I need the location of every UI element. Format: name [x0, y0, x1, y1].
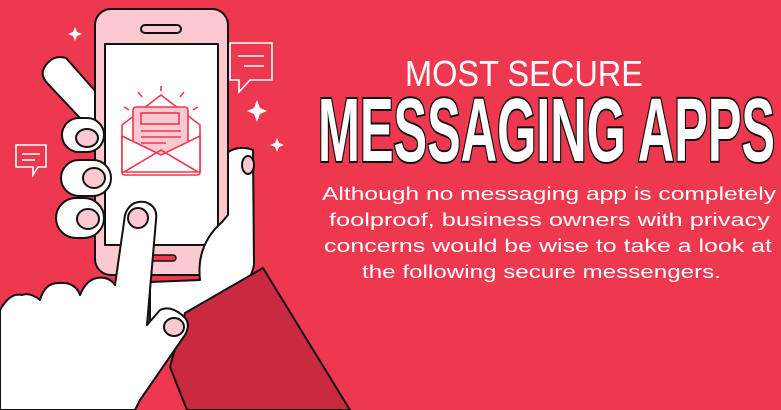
icon: sparkles: [68, 27, 284, 152]
pointing hand: [0, 202, 188, 410]
phone: [95, 9, 228, 275]
paragraph: the following secure messengers.: [362, 262, 721, 282]
holding hand right side: [150, 148, 254, 328]
paragraph: concerns would be wise to take a look at: [324, 236, 772, 256]
fingers left: [56, 118, 111, 238]
paragraph: foolproof, business owners with privacy: [329, 210, 770, 230]
paragraph: [322, 184, 776, 282]
back finger (top-left): [43, 57, 112, 135]
icon: envelope on screen: [122, 86, 200, 175]
paragraph: Although no messaging app is completely: [322, 184, 776, 204]
icon: chat bubble left: [16, 145, 46, 175]
icon: chat bubble right: [230, 43, 272, 92]
title: MOST SECURE: MOST SECURE: [405, 53, 643, 94]
sleeve: [170, 268, 350, 410]
illustration: hands holding phone: [0, 9, 350, 410]
